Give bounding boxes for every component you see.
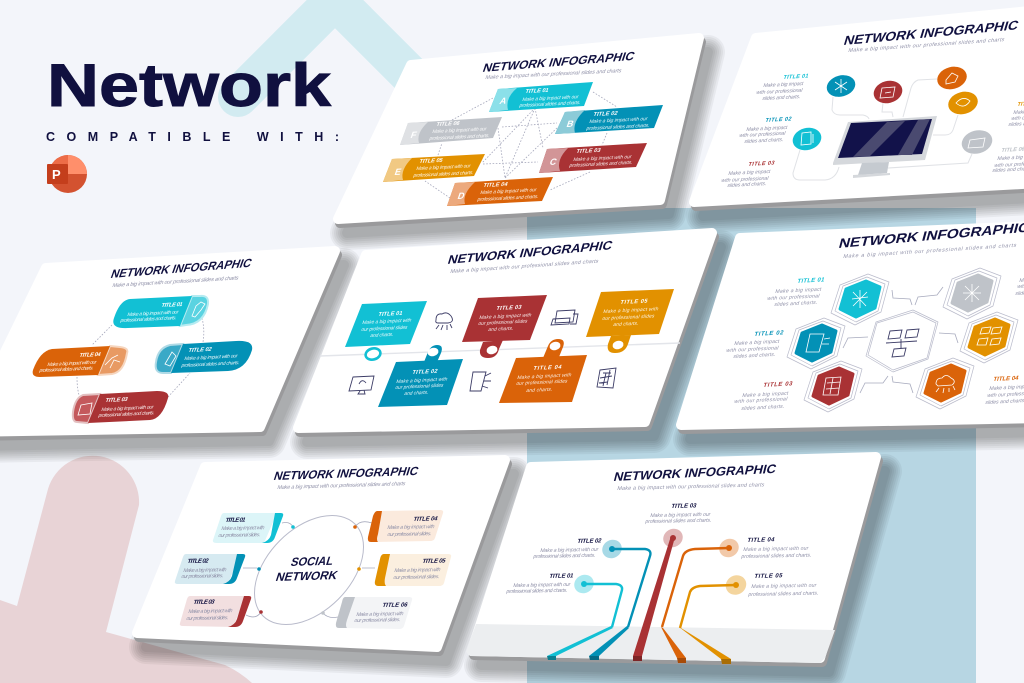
pill 02 [156,341,252,373]
slide 4 heading: Make a big impact with our professional slides and charts [449,259,599,275]
card 02: and charts. [403,390,429,397]
card A: Make a big impact with our [521,94,580,103]
card 06: Make a big impact with [355,611,404,618]
card 04: TITLE 04 [532,365,563,372]
card 05: our professional slides. [392,574,440,581]
pill 01: Make a big impact with our [126,310,180,318]
slide 5 heading: NETWORK INFOGRAPHIC [837,220,1024,251]
hexagon 02 [787,318,845,369]
card 01: Make a big impact with [361,318,412,326]
card B: Make a big impact with our [588,116,649,125]
labels: Make a big impact with our [750,583,817,590]
line amber [679,582,739,664]
pill 01: professional slides and charts. [119,315,177,324]
panel: slide 1 hexagon network [338,38,708,233]
line icons [349,310,616,394]
pill 04: Make a big impact with our [46,360,98,368]
slide 5 heading [837,220,1024,260]
panel: slide 3 pills [0,251,344,446]
slide 1 heading: NETWORK INFOGRAPHIC [481,49,637,75]
labels right [991,101,1024,174]
card 03: TITLE 03 [192,599,216,606]
pill 01: TITLE 01 [160,302,184,309]
center label: social network: SOCIAL [289,554,336,569]
panel: slide 6 social network [137,460,514,661]
slide 7 heading: NETWORK INFOGRAPHIC [612,461,778,484]
card F: Make a big impact with our [431,126,488,135]
labels left: with our professional [755,88,803,96]
card 04: Make a big impact with [516,372,572,381]
card 02: our professional slides. [180,573,224,580]
slide 6 heading: NETWORK INFOGRAPHIC [272,464,421,483]
labels left: TITLE 02 [764,117,792,124]
card D: TITLE 04 [482,182,509,189]
card 03: TITLE 03 [495,305,522,312]
labels: professional slides and charts. [740,553,812,560]
card A: TITLE 01 [524,88,550,95]
labels: Make a big impact with our [512,582,571,589]
pill 02: Make a big impact with our [183,353,239,362]
labels left: TITLE 01 [782,74,810,81]
card E: E [393,167,403,177]
hexagon 06 [943,268,1001,319]
slide 1 heading: Make a big impact with our professional slides and charts [484,68,623,81]
card 01 [345,301,427,361]
card D: Make a big impact with our [479,187,538,196]
card 05 [586,289,674,353]
hexagon 05 [960,312,1018,363]
ring and connectors [234,495,384,645]
center hexagon [866,310,938,372]
labels: TITLE 03 [762,380,794,389]
labels: with our professional [733,396,788,405]
pill 02: professional slides and charts. [180,360,240,369]
card 03: and charts. [487,326,514,333]
card E: TITLE 05 [418,158,444,165]
labels left: with our professional [738,131,786,139]
card A [489,82,593,112]
card D [447,177,553,206]
labels: professional slides and charts. [644,518,712,525]
card D: D [456,191,466,201]
labels: slides and charts. [740,404,785,412]
labels left: slides and charts. [761,94,801,102]
card 01: TITLE 01 [224,517,247,524]
card 05: and charts. [612,321,639,328]
card D: professional slides and charts. [476,194,539,203]
labels: Make a big impact with our [539,547,599,554]
slide 6 heading: Make a big impact with our professional slides and charts [276,481,406,491]
slide 4 heading: NETWORK INFOGRAPHIC [446,238,615,267]
card 04: our professional slides. [386,531,432,538]
heading: Network: Network [47,52,332,119]
card 05 [375,554,451,586]
slide 7 heading: Make a big impact with our professional slides and charts [616,482,765,492]
slide 2 heading: NETWORK INFOGRAPHIC [842,18,1021,48]
slide 3 heading: NETWORK INFOGRAPHIC [109,256,254,281]
line red [633,535,676,661]
card 02: Make a big impact with [182,567,227,574]
connector lines [843,287,958,393]
connector lines [793,79,972,180]
center label: social network [274,554,340,584]
card 03: Make a big impact with [478,312,532,321]
labels left: slides and charts. [743,137,784,145]
labels: TITLE 02 [753,329,785,338]
card 02: TITLE 02 [411,369,438,376]
card C: TITLE 03 [575,148,601,155]
labels: Make a big impact with our [742,546,809,553]
card 05: Make a big impact with [602,306,659,315]
card C: professional slides and charts. [568,160,633,169]
card 01: TITLE 01 [377,311,404,318]
center label: social network: NETWORK [274,568,340,584]
card C: Make a big impact with our [572,154,633,163]
card A: professional slides and charts. [518,100,581,109]
card 02: our professional slides [394,383,445,391]
hexagon 01 [831,274,889,325]
card 01: and charts. [369,332,394,339]
labels: TITLE 01 [548,572,575,580]
line orange [661,545,732,663]
dashed ring [77,318,204,398]
icon: PowerPoint logo: P [52,167,61,182]
card F [400,117,502,145]
labels [505,502,819,598]
subheading: compatible with: COMPATIBLE WITH: [46,130,339,144]
labels: slides and charts. [732,352,776,360]
pill 03: professional slides and charts. [97,410,155,419]
card 02 [378,345,463,407]
card 02: Make a big impact with [395,377,448,385]
card 04 [499,339,587,403]
pill 03 [73,391,168,423]
labels: TITLE 04 [746,536,776,544]
panel: slide 4 timeline cards [298,233,721,442]
card 03: Make a big impact with [187,608,233,615]
icon circles [790,63,995,157]
line cyan [547,581,622,660]
slide 3 heading: Make a big impact with our professional slides and charts [111,276,240,289]
card 03 [462,295,547,358]
card B: B [565,119,575,129]
halos [571,525,750,598]
card 01 [213,513,283,543]
card 01: our professional slides. [217,532,261,539]
labels left: Make a big impact [745,125,789,133]
labels: Make a big impact with our [649,512,711,519]
labels left: TITLE 03 [747,161,775,168]
labels: Make a big impact [733,339,781,347]
monitor [833,116,937,178]
labels left [720,74,810,189]
labels: professional slides and charts. [747,591,819,598]
labels left: slides and charts. [726,181,767,189]
pill 04: professional slides and charts. [38,365,94,374]
background: light blue chevron [238,0,480,145]
card 04: TITLE 04 [412,515,439,523]
pill 02: TITLE 02 [187,347,212,354]
dashed network lines [425,92,617,198]
card 06 [336,597,412,629]
card C: C [548,157,558,167]
card F: professional slides and charts. [428,133,490,142]
labels: TITLE 02 [576,537,603,545]
labels [725,276,1024,412]
card C [539,143,647,173]
labels: professional slides and charts. [532,553,596,560]
card A: A [498,96,508,106]
pill 04: TITLE 04 [78,352,102,359]
card E: Make a big impact with our [415,163,472,172]
card B: professional slides and charts. [585,123,650,132]
card F: TITLE 06 [435,121,460,128]
panel: slide 7 roads [466,457,885,672]
card 05: our professional slides [601,313,656,322]
slide 2 heading: Make a big impact with our professional slides and charts [847,37,1005,54]
card 06: our professional slides. [353,617,401,624]
card 01: Make a big impact with [220,525,265,532]
pill 04 [33,346,127,377]
labels: with our professional [725,345,779,354]
card 04 [368,510,443,542]
card 06: TITLE 06 [381,602,409,609]
pill 03: TITLE 03 [104,397,128,404]
labels: Make a big impact [774,287,823,295]
card B [555,105,663,134]
labels left: Make a big impact [762,81,805,89]
labels: TITLE 04 [992,375,1020,383]
card E [383,154,485,182]
card E: professional slides and charts. [412,170,474,179]
card 04: and charts. [525,387,553,394]
card 05: TITLE 05 [421,558,447,565]
pill 03: Make a big impact with our [100,405,155,413]
labels: professional slides and charts. [505,588,568,595]
labels: TITLE 01 [796,276,826,285]
card 03 [180,596,251,627]
card 03: our professional slides [477,319,529,327]
card 01: our professional slides [360,325,409,333]
background: light blue block [527,208,976,683]
slide 6 heading [272,464,421,491]
line blue [589,546,650,660]
card B: TITLE 02 [592,111,618,118]
panel: slide 2 monitor [694,8,1024,216]
card 05: TITLE 05 [619,299,649,306]
card 03: our professional slides. [185,615,229,622]
labels: Make a big impact [741,391,790,399]
labels left: with our professional [720,176,769,184]
labels: TITLE 05 [753,572,784,580]
background: pink rounded shape [0,456,252,683]
card 02: TITLE 02 [186,558,210,565]
hexagon 04 [916,358,974,409]
card 02 [175,554,245,584]
labels: TITLE 03 [670,502,698,510]
slide 5 heading: Make a big impact with our professional slides and charts [842,243,1017,260]
card 04: our professional slides [515,379,569,387]
card 04: Make a big impact with [386,524,435,531]
labels: with our professional [766,293,820,302]
card F: F [409,130,418,140]
labels left: Make a big impact [727,169,772,177]
icon: PowerPoint logo [47,155,87,193]
labels: slides and charts. [773,300,818,308]
hexagon 03 [804,361,862,412]
card 05: Make a big impact with [393,567,441,574]
panel: slide 5 hexagons [681,220,1024,439]
pill 01 [113,296,208,328]
